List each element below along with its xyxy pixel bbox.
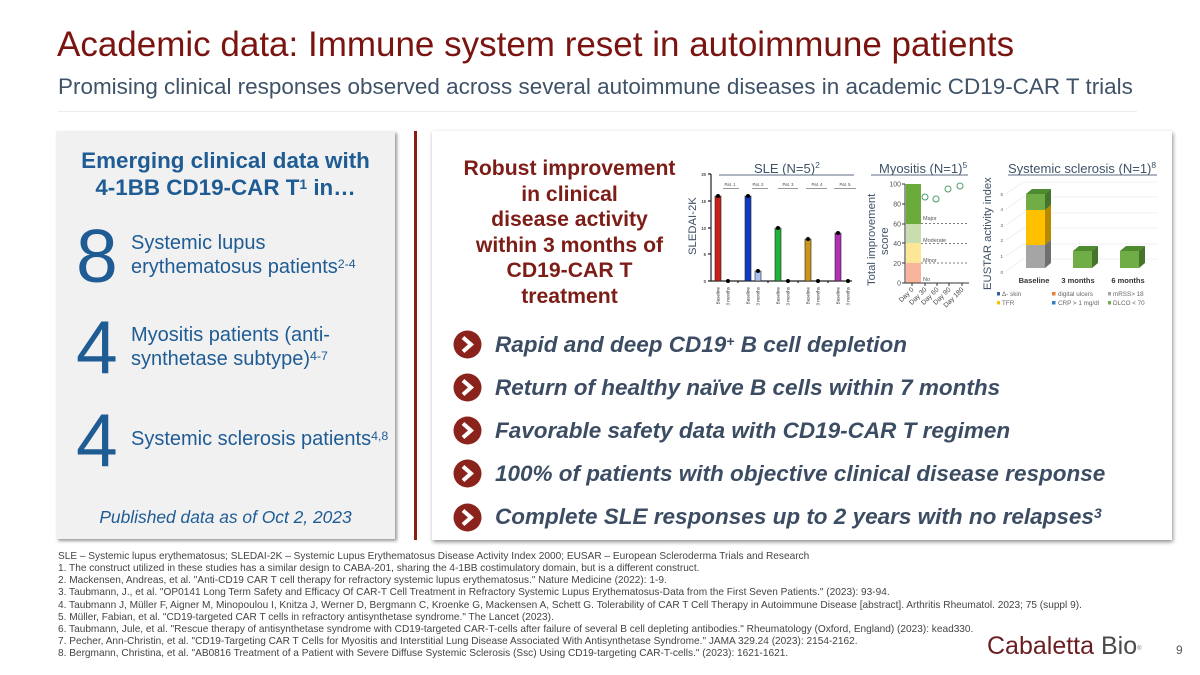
stat: myositis patients: Myositis patients (anti-	[131, 324, 330, 346]
legend: digital ulcers	[1058, 291, 1093, 298]
chart: myositis improvement: Day 90	[932, 286, 953, 307]
footnotes and references: 5. Müller, Fabian, et al. "CD19-targeted CAR T cells in refractory antisynthetase syndrome." The Lancet (2023).	[58, 612, 554, 623]
logo: Cabaletta Bio: Cabaletta Bio®	[987, 632, 1142, 660]
x labels: 3 months	[786, 286, 790, 306]
chart: systemic sclerosis stacked bars: 1	[1000, 254, 1003, 259]
x labels: 3 months	[726, 286, 730, 306]
chart: myositis improvement: Day 30	[908, 286, 929, 307]
page number: 9	[1176, 643, 1183, 657]
icon: chevron	[454, 504, 482, 532]
header rule	[58, 111, 1137, 112]
baseline bar	[1026, 189, 1051, 268]
footnotes and references: 4. Taubmann J, Müller F, Aigner M, Minopoulou I, Knitza J, Werner D, Bergmann C, Kroenke G, Mackensen A, Schett G. Tolerability of CAR T Cell Therapy in Autoimmune Disease [abstract]. Arthritis Rheumatol. 2023; 75 (suppl 9).	[58, 600, 1082, 611]
legend: mRSS> 18	[1113, 291, 1144, 298]
chart: SLE bar chart: Pat. 3	[783, 182, 794, 187]
footnotes and references: 1. The construct utilized in these studies has a similar design to CABA-201, sharing the 4-1BB costimulatory domain, but is a different construct.	[58, 563, 699, 574]
icon: chevron	[454, 374, 482, 402]
legend: DLCO < 70	[1113, 300, 1145, 307]
stat: systemic sclerosis patients: Systemic sclerosis patients4,8	[131, 428, 388, 450]
y axis title: Total improvement	[866, 193, 878, 286]
chart: myositis improvement: Day 60	[920, 286, 941, 307]
chart: SLE bar chart: Pat. 2	[753, 182, 764, 187]
chart title: 2	[815, 160, 820, 170]
x labels	[716, 286, 850, 306]
panel: patient counts	[56, 131, 395, 539]
x labels: 3 months	[756, 286, 760, 306]
bars	[715, 196, 841, 281]
chart: SLE bar chart: 0	[704, 279, 707, 284]
subtitle: Promising clinical responses observed across several autoimmune diseases in academic CD19-CAR T trials	[58, 74, 1133, 99]
chart title: Systemic sclerosis (N=1)	[1008, 161, 1151, 176]
chart: myositis improvement: 40	[893, 241, 901, 248]
heading: robust improvement: disease activity	[491, 208, 648, 231]
x labels: Baseline	[746, 287, 750, 304]
stat: myositis patients: 4	[76, 305, 118, 389]
x labels: Baseline	[806, 287, 810, 304]
chart: myositis improvement: Day 180	[943, 286, 966, 309]
chart title: 5	[962, 160, 967, 170]
x labels: 3 months	[846, 286, 850, 306]
bullet: complete SLE responses: Complete SLE responses up to 2 years with no relapses3	[495, 504, 1102, 529]
chart: systemic sclerosis stacked bars	[982, 160, 1158, 307]
x labels: Baseline	[836, 287, 840, 304]
chart: myositis improvement: 60	[893, 222, 901, 228]
chart: SLE bar chart: Pat. 4	[812, 182, 823, 187]
chart title: 8	[1151, 160, 1156, 170]
footnotes and references: 3. Taubmann, J., et al. "OP0141 Long Term Safety and Efficacy Of CAR-T Cell Treatment in Refractory Systemic Lupus Erythematosus-Data from the First Seven Patients." (2023): 93-94.	[58, 587, 890, 598]
chart: systemic sclerosis stacked bars: 3 months	[1061, 276, 1095, 285]
data cutoff note: Published data as of Oct 2, 2023	[99, 507, 352, 527]
chart: systemic sclerosis stacked bars: 0	[1000, 270, 1003, 275]
icon: chevron	[454, 330, 482, 358]
title: Academic data: Immune system reset in autoimmune patients	[57, 25, 1014, 64]
panel heading: 4-1BB CD19-CAR T1 in…	[95, 174, 356, 200]
panel heading: Emerging clinical data with	[81, 148, 370, 173]
panel: clinical results	[432, 131, 1172, 540]
data points	[922, 183, 963, 202]
chart: systemic sclerosis stacked bars: 5	[1000, 192, 1003, 197]
heading: robust improvement	[464, 157, 676, 308]
chart: SLE bar chart	[687, 160, 856, 306]
stat: SLE patients	[76, 214, 356, 298]
stat: systemic sclerosis patients: 4	[76, 398, 118, 482]
chart title: SLE (N=5)	[754, 161, 815, 176]
chart: systemic sclerosis stacked bars: 6 months	[1111, 276, 1145, 285]
stat: SLE patients: Systemic lupus	[131, 232, 266, 254]
legend: CRP > 1 mg/dl	[1058, 300, 1099, 307]
vertical divider	[414, 131, 417, 540]
x labels: Baseline	[776, 287, 780, 304]
bullet: objective response: 100% of patients with objective clinical disease response	[495, 461, 1105, 486]
chart: myositis improvement: No	[923, 277, 930, 283]
legend	[997, 291, 1145, 307]
chart: myositis improvement	[866, 160, 969, 309]
heading: robust improvement: CD19-CAR T	[507, 259, 632, 282]
chart: SLE bar chart: 10	[701, 226, 707, 231]
chart: SLE bar chart: 20	[701, 172, 707, 177]
chart: SLE bar chart: Pat. 5	[840, 182, 851, 187]
footnotes and references	[58, 551, 1082, 659]
stat: myositis patients: synthetase subtype)4-7	[131, 348, 328, 370]
x labels: Baseline	[716, 287, 720, 304]
chart: SLE bar chart: 5	[704, 252, 707, 257]
chart: myositis improvement: Minor	[923, 258, 937, 264]
chart: myositis improvement: 20	[893, 261, 901, 268]
footnotes and references: 6. Taubmann, Jule, et al. "Rescue therapy of antisynthetase syndrome with CD19-targeted CAR-T-cells after failure of several B cell depleting antibodies." Rheumatology (Oxford, England) (2023): kead330.	[58, 624, 973, 635]
chart title: Myositis (N=1)	[879, 161, 962, 176]
stat: SLE patients: 8	[76, 214, 118, 298]
y axis title: EUSTAR activity index	[982, 177, 994, 290]
bullet: B cell depletion: Rapid and deep CD19+ B cell depletion	[495, 332, 907, 357]
x labels: 3 months	[816, 286, 820, 306]
chart: SLE bar chart: 15	[701, 199, 707, 204]
footnotes and references: 2. Mackensen, Andreas, et al. "Anti-CD19 CAR T cell therapy for refractory systemic lupus erythematosus." Nature Medicine (2022): 1-9.	[58, 575, 667, 586]
3 month bar	[1073, 246, 1098, 268]
chart: SLE bar chart: Pat. 1	[725, 182, 736, 187]
6 month bar	[1120, 246, 1145, 268]
chart: myositis improvement: score	[879, 227, 891, 255]
footnotes and references: 8. Bergmann, Christina, et al. "AB0816 Treatment of a Patient with Severe Diffuse Systemic Sclerosis (Ssc) Using CD19-targeting CAR-T-cells." (2023): 1621-1621.	[58, 648, 788, 659]
heading: robust improvement: Robust improvement	[464, 157, 675, 180]
footnotes and references: SLE – Systemic lupus erythematosus; SLEDAI-2K – Systemic Lupus Erythematosus Disease Activity Index 2000; EUSAR – European Scleroderma Trials and Research	[58, 551, 809, 562]
stat: myositis patients	[76, 305, 330, 389]
bullet: naive B cells: Return of healthy naïve B cells within 7 months	[495, 375, 1000, 400]
chart: systemic sclerosis stacked bars: 4	[1000, 207, 1003, 212]
chart: myositis improvement: 100	[889, 182, 901, 188]
stat: SLE patients: erythematosus patients2-4	[131, 256, 356, 278]
chart: myositis improvement: Moderate	[923, 238, 946, 244]
y axis title: SLEDAI-2K	[687, 197, 699, 255]
chart: myositis improvement: Major	[923, 216, 937, 222]
heading: robust improvement: within 3 months of	[476, 234, 663, 257]
chart: systemic sclerosis stacked bars: 3	[1000, 223, 1003, 228]
footnotes and references: 7. Pecher, Ann-Christin, et al. "CD19-Targeting CAR T Cells for Myositis and Interstitial Lung Disease Associated With Antisynthetase Syndrome." JAMA 329.24 (2023): 2154-2162.	[58, 636, 858, 647]
heading: robust improvement: in clinical	[521, 183, 618, 206]
stat: systemic sclerosis patients	[76, 398, 388, 482]
icon: chevron	[454, 460, 482, 488]
chart: myositis improvement: Day 0	[898, 286, 916, 304]
chart: myositis improvement: 80	[893, 202, 901, 208]
icon: chevron	[454, 416, 482, 444]
chart: systemic sclerosis stacked bars: Baseline	[1019, 276, 1049, 285]
bullet: safety: Favorable safety data with CD19-CAR T regimen	[495, 418, 1010, 443]
chart: myositis improvement: 0	[897, 280, 901, 288]
panel heading	[81, 148, 370, 200]
response bands	[906, 184, 921, 224]
chart: systemic sclerosis stacked bars: 2	[1000, 238, 1003, 243]
data points	[716, 194, 850, 283]
legend: Δ- skin	[1002, 291, 1022, 298]
heading: robust improvement: treatment	[521, 285, 618, 308]
legend: TFR	[1002, 300, 1015, 307]
